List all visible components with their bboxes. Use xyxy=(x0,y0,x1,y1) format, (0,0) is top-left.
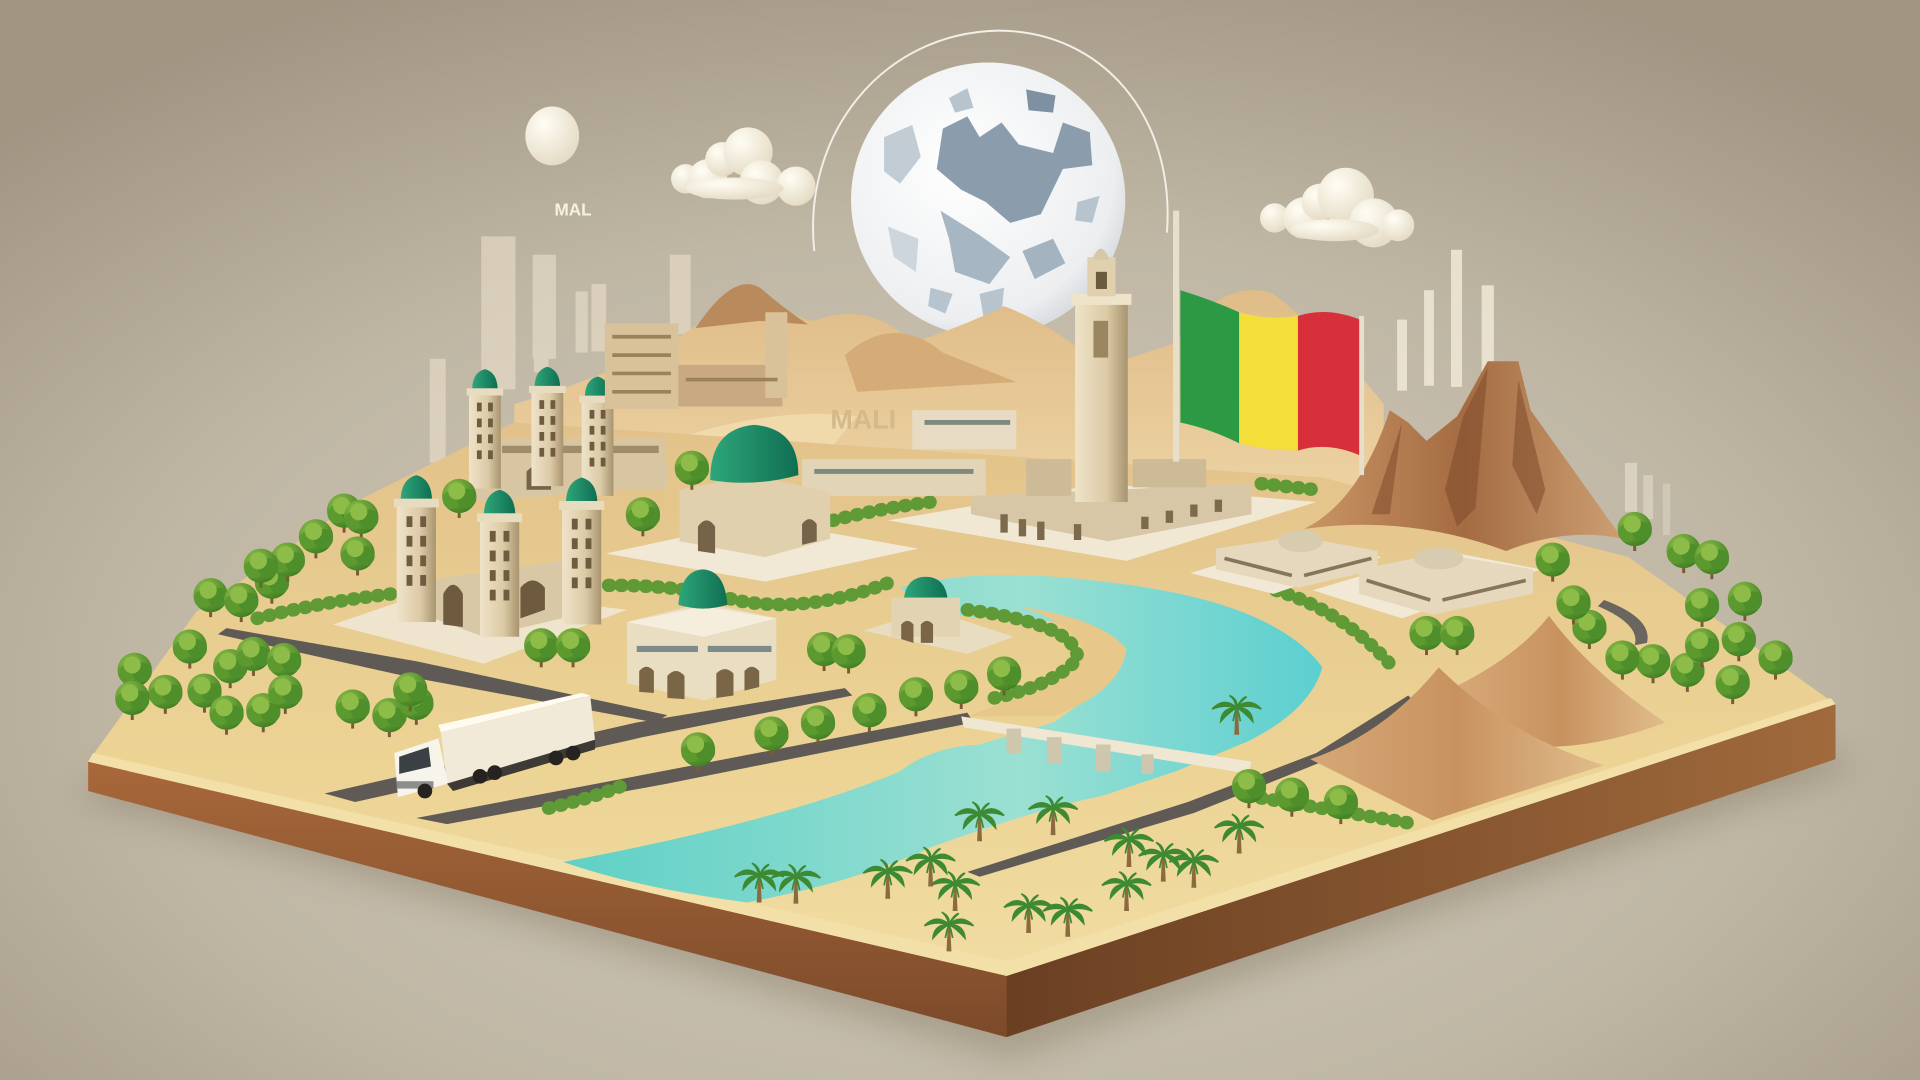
small sphere xyxy=(525,107,579,165)
palace with minarets xyxy=(459,367,667,502)
trees xyxy=(115,451,1793,824)
platform shadow xyxy=(73,551,1861,1059)
government buildings right xyxy=(1190,530,1540,618)
palms xyxy=(735,696,1264,951)
bridge xyxy=(961,716,1251,774)
dune pyramid front xyxy=(1310,667,1604,820)
road left xyxy=(218,628,667,722)
cloud left xyxy=(671,127,816,206)
platform side left xyxy=(88,762,1007,1037)
MALI background sign and buildings: MALI xyxy=(830,405,896,435)
mountain right xyxy=(1304,361,1622,551)
truck xyxy=(394,693,595,798)
central minaret mosque xyxy=(888,249,1316,561)
platform top xyxy=(88,422,1836,976)
cloud right xyxy=(1260,168,1414,247)
platform side right xyxy=(1007,704,1836,1037)
river xyxy=(563,575,1322,902)
road far right xyxy=(1598,600,1648,645)
flag of Mali xyxy=(1180,290,1364,475)
road right xyxy=(967,696,1414,877)
back left building xyxy=(605,312,787,409)
road lower xyxy=(324,688,852,802)
MALI background sign and buildings xyxy=(802,405,1016,496)
road middle xyxy=(416,713,973,824)
ghost skyline left xyxy=(430,236,691,463)
ghost skyline right xyxy=(1397,250,1670,535)
small domed building xyxy=(627,569,776,700)
domed mosque xyxy=(606,425,918,582)
back dunes xyxy=(514,284,1384,539)
scrub bushes xyxy=(257,484,1408,823)
small MAL label: MAL xyxy=(555,200,592,220)
riverside pavilion xyxy=(863,577,1014,654)
dune pyramid back xyxy=(1457,616,1665,747)
moon globe xyxy=(851,62,1125,337)
flag pole xyxy=(1173,211,1179,462)
fortress gate xyxy=(333,475,627,664)
river bank highlight xyxy=(967,606,1127,716)
moon ring xyxy=(813,31,1168,251)
